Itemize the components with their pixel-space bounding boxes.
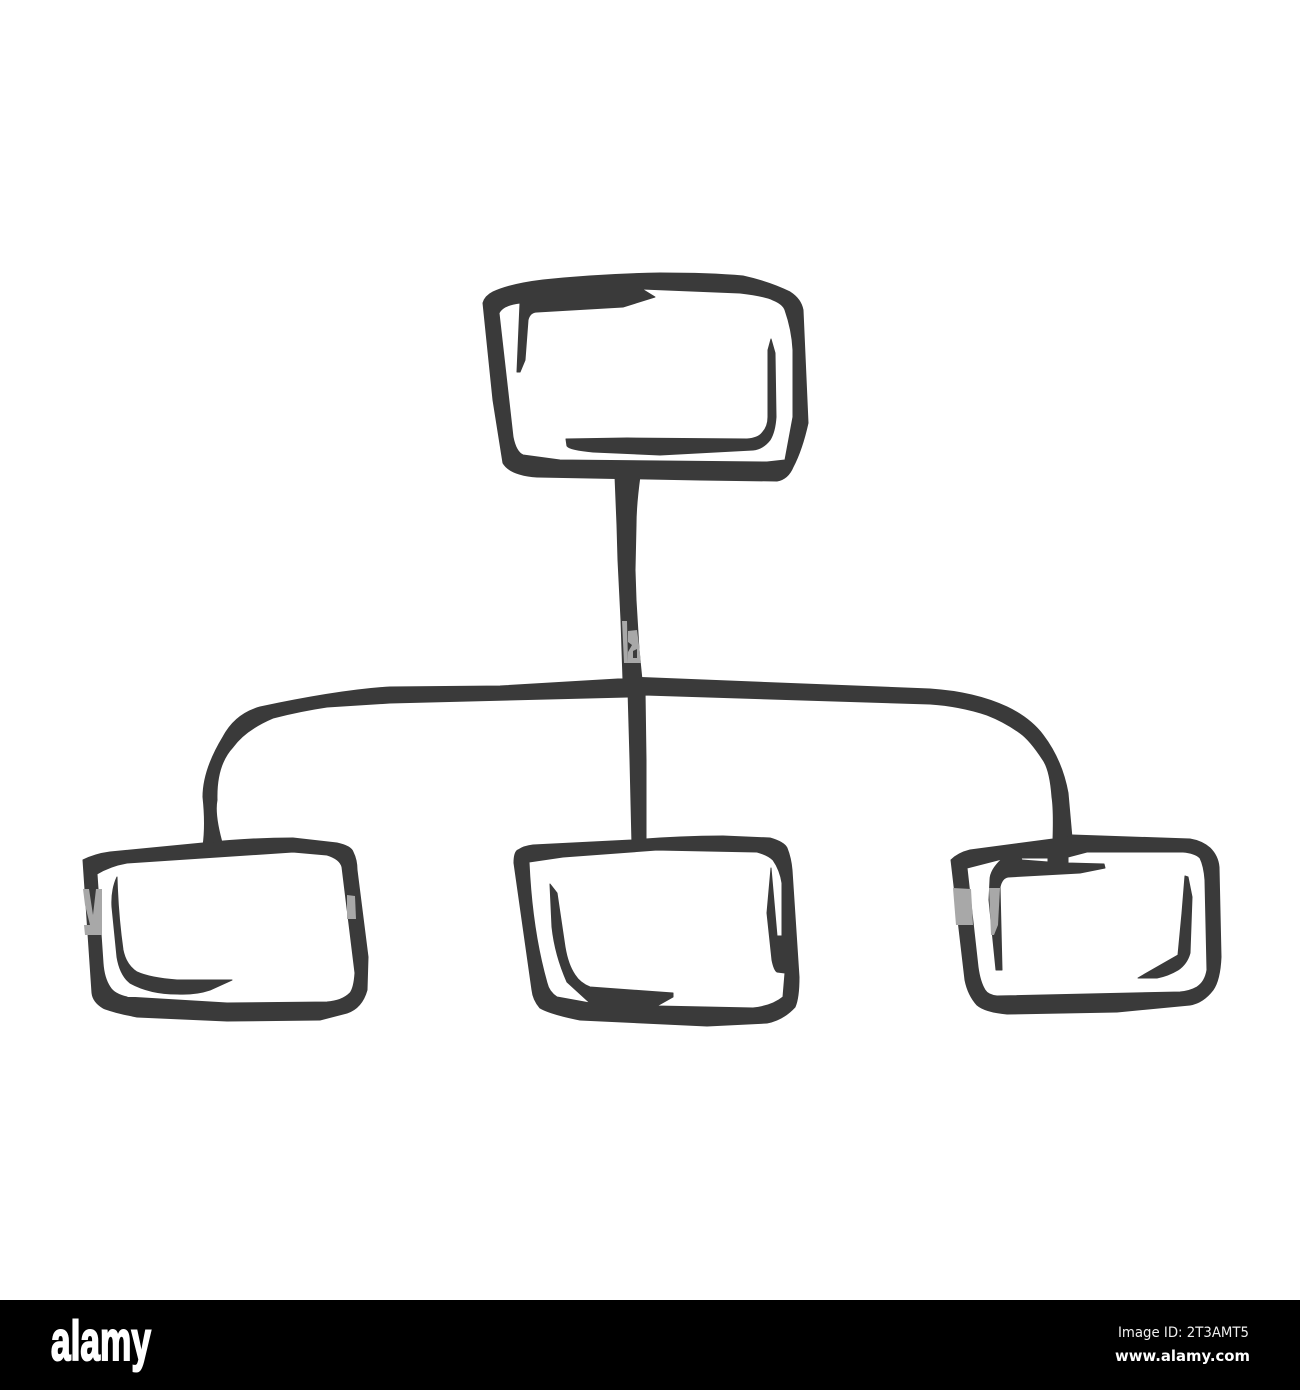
connector: left branch [203, 679, 628, 846]
watermark fragments [83, 621, 1000, 935]
watermark: y on right box [989, 888, 1000, 935]
left box outline [83, 838, 368, 1021]
top box outline [483, 273, 808, 481]
box: left node [83, 838, 368, 1021]
connector: vertical stem from top box [615, 476, 642, 680]
box: top node [483, 273, 808, 481]
watermark: m on right box [953, 888, 973, 925]
footer logo: alamy [51, 1309, 151, 1372]
footer url: www.alamy.com [1115, 1347, 1250, 1365]
middle box outline [514, 836, 799, 1026]
right box outline [951, 835, 1221, 1014]
box: middle node [514, 836, 799, 1026]
connector tree [203, 476, 1072, 846]
connector: centre drop to middle box [628, 690, 646, 845]
footer image id: Image ID: 2T3AMT5 [1118, 1325, 1249, 1341]
right box inner shading stroke [1138, 876, 1192, 978]
top box inner shading stroke [566, 339, 776, 455]
footer bar [0, 1300, 1300, 1390]
watermark: letters on the stem [622, 621, 641, 663]
watermark: y on left box [83, 889, 102, 935]
watermark: a on left box [347, 895, 356, 919]
footer background [0, 1300, 1300, 1390]
connector: right branch [628, 677, 1072, 840]
left box inner shading stroke [112, 877, 232, 994]
box: right node [951, 835, 1221, 1014]
